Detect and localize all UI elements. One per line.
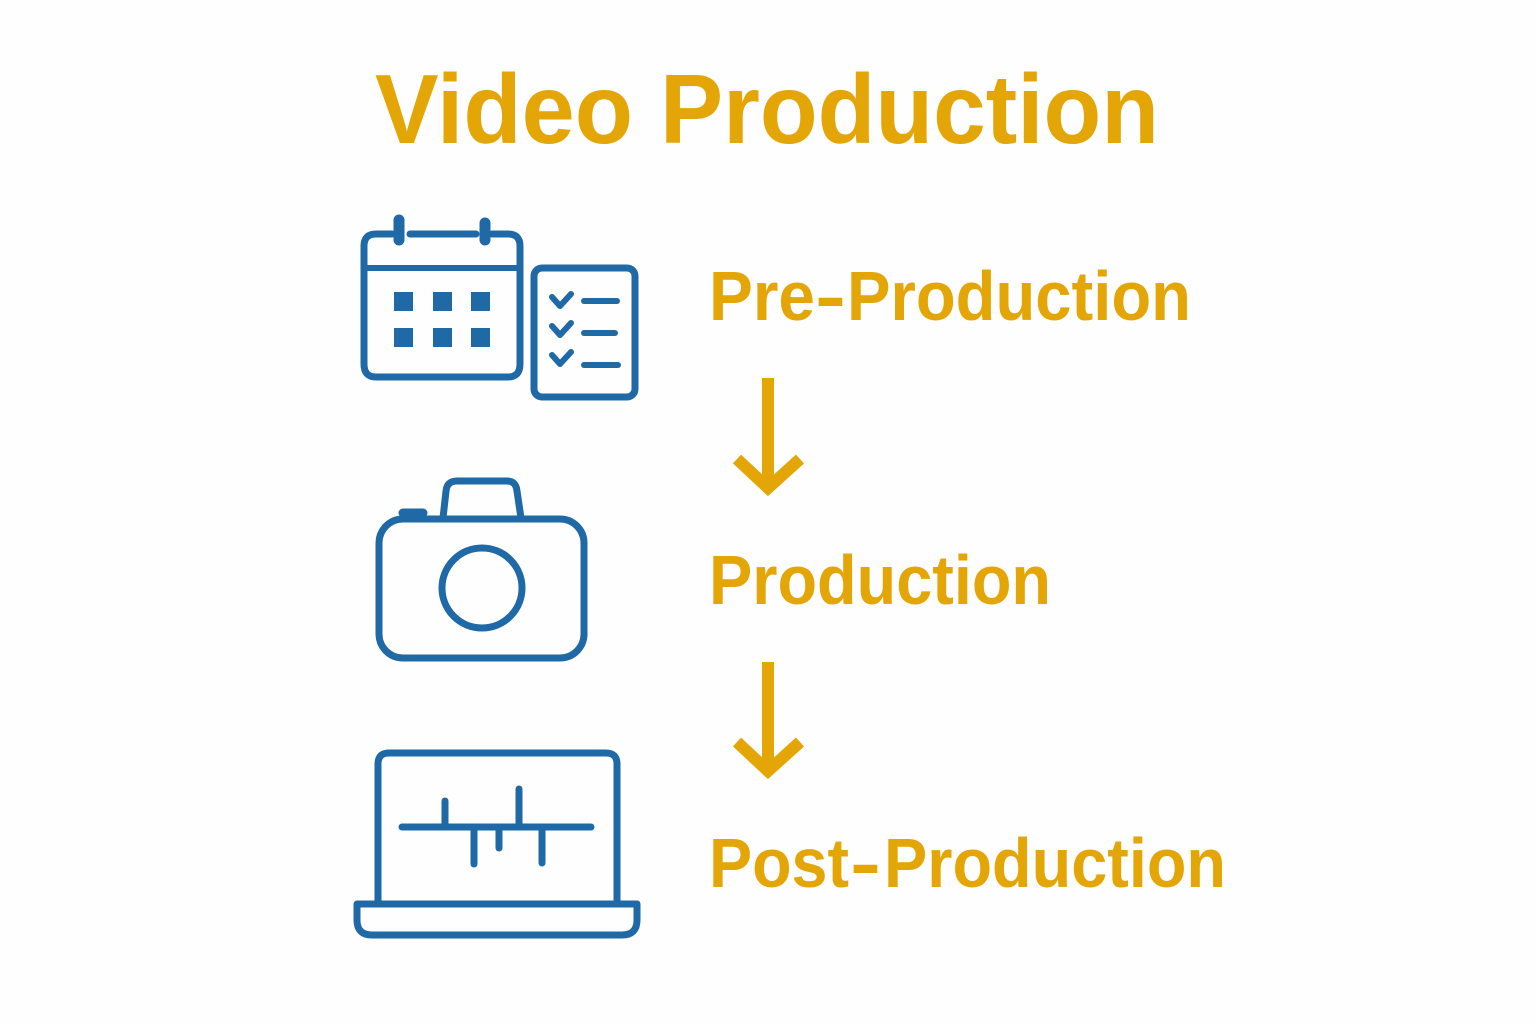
calendar rings (399, 220, 485, 240)
icon: camera (379, 481, 584, 658)
checklist lines (584, 301, 618, 365)
waveform (402, 824, 591, 830)
heading: pre-production: Production (847, 257, 1191, 335)
camera body (379, 519, 584, 658)
camera top (443, 481, 521, 518)
heading: post-production (709, 824, 1226, 902)
calendar outline (364, 234, 520, 377)
arrow: production to post-production (737, 662, 800, 772)
arrow: pre-production to production (737, 378, 800, 488)
laptop base (357, 904, 637, 935)
camera lens (442, 548, 522, 628)
calendar header line (365, 265, 519, 271)
heading: pre-production: - (815, 257, 846, 335)
heading: pre-production (709, 257, 1191, 335)
icon: calendar and checklist (364, 220, 635, 397)
title: Production (660, 54, 1159, 164)
title (375, 54, 1159, 164)
calendar date squares (394, 292, 490, 347)
checklist checks (552, 294, 571, 364)
heading: post-production: Production (884, 824, 1226, 902)
title: Video (375, 54, 633, 164)
camera button (403, 508, 423, 518)
icon: laptop with editing timeline (357, 753, 637, 935)
laptop screen (378, 753, 617, 904)
heading: post-production: Post (709, 824, 849, 902)
heading: production: Production (709, 541, 1051, 619)
heading: pre-production: Pre (709, 257, 815, 335)
heading: post-production: - (850, 824, 881, 902)
checklist outline (534, 268, 635, 397)
